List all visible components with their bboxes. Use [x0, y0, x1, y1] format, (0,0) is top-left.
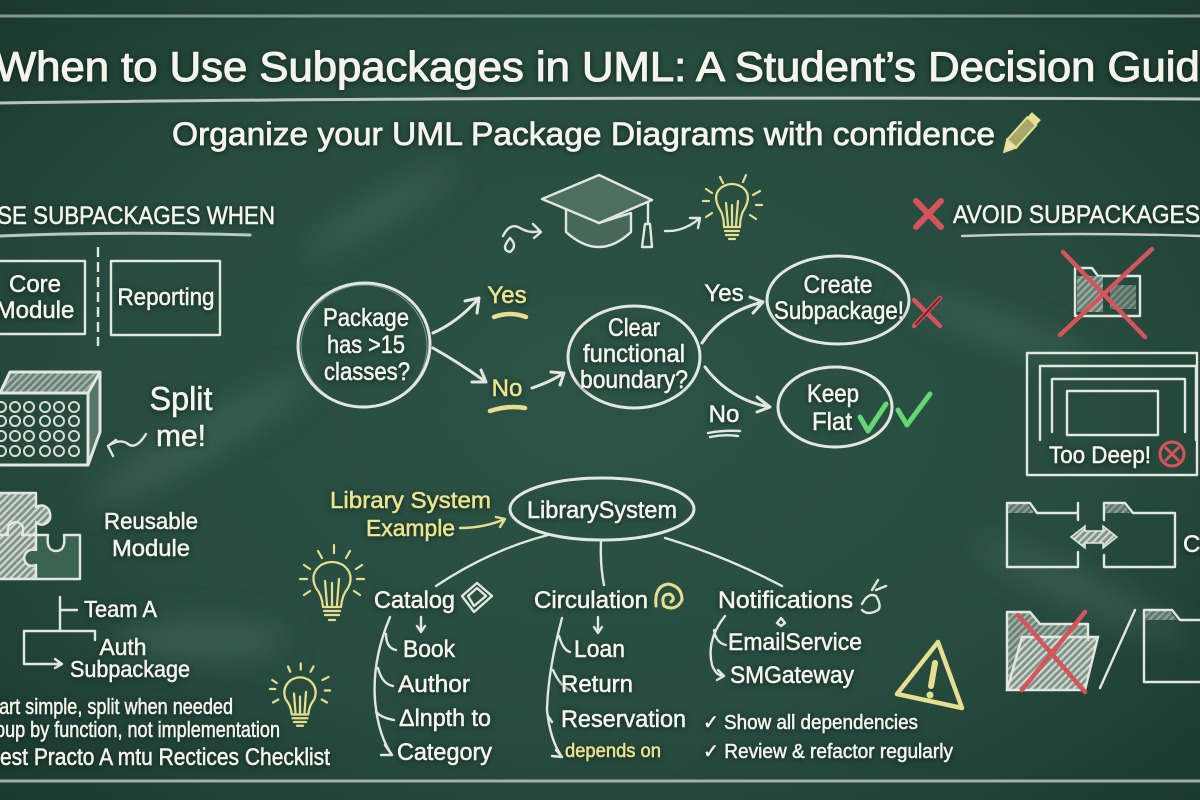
node: package has more than 15 classes — [293, 277, 435, 413]
label: no boundary: No — [709, 401, 739, 428]
org tree: team a and auth subpackage: Subpackage — [70, 656, 190, 682]
panel: use subpackages when — [0, 202, 330, 771]
column: circulation: depends on — [565, 741, 661, 762]
label: library system example — [330, 487, 491, 541]
label: yes boundary: Yes — [704, 280, 744, 307]
node: clear functional boundary: boundary? — [580, 366, 688, 394]
icon: large class block — [0, 372, 100, 465]
org tree: team a and auth subpackage — [24, 596, 190, 682]
label: no — [490, 375, 525, 411]
arrow: to block — [108, 434, 146, 456]
label: yes: Yes — [487, 282, 527, 309]
node: library system — [510, 478, 694, 540]
column: notifications — [711, 580, 886, 689]
divider slash — [1100, 610, 1135, 688]
panel: avoid subpackages — [916, 201, 1200, 692]
column: catalog — [374, 583, 492, 766]
node: keep flat — [778, 367, 892, 447]
arrow: to yes — [433, 298, 479, 333]
box: core module: Core — [9, 271, 61, 298]
icon: pencil — [1000, 112, 1041, 156]
column: circulation: Loan — [574, 636, 625, 663]
icon: puzzle pieces — [0, 493, 80, 579]
org tree: team a and auth subpackage: Auth — [100, 634, 146, 660]
node: create subpackage — [767, 256, 909, 344]
label: split me — [150, 380, 212, 453]
node: keep flat: Flat — [812, 408, 852, 436]
icon: light bulb top — [703, 175, 762, 239]
column: circulation: Return — [561, 671, 633, 698]
icon: green check one — [860, 404, 886, 431]
label: no: No — [492, 375, 522, 402]
node: package has more than 15 classes: has >15 — [327, 331, 405, 359]
diagram: nested packages too deep — [1027, 353, 1197, 475]
column: notifications: EmailService — [728, 629, 862, 656]
icon: crossed open folder — [1007, 612, 1098, 692]
icon: plain folder — [1144, 610, 1200, 682]
column: circulation: Circulation — [534, 587, 648, 614]
icon: light bulb lower left — [270, 664, 330, 726]
label: library system example: Library System — [330, 487, 491, 513]
label: split me: me! — [156, 418, 206, 453]
arrow: cap to bulb — [665, 218, 700, 231]
node: clear functional boundary: functional — [583, 340, 685, 368]
column: catalog: Author — [398, 671, 470, 698]
branches — [436, 535, 782, 586]
column: circulation — [534, 584, 686, 762]
box: reporting: Reporting — [118, 284, 214, 311]
panel: library system example — [300, 478, 962, 766]
label: reusable module — [104, 508, 198, 561]
label: split me: Split — [150, 380, 212, 417]
arrow: example to root — [460, 517, 505, 528]
panel: decision flowchart — [293, 175, 940, 447]
label: reusable module: Reusable — [104, 508, 198, 534]
node: library system: LibrarySystem — [527, 497, 677, 524]
arrow: boundary to keep — [705, 367, 770, 412]
icon: light bulb center left — [300, 545, 364, 620]
column: catalog: Δlnpth to — [399, 705, 491, 732]
arrow: to no — [433, 348, 486, 382]
column: catalog: Category — [397, 739, 492, 766]
box: reporting — [111, 261, 220, 335]
label: library system example: Example — [366, 515, 455, 541]
label: reusable module: Module — [112, 535, 190, 561]
best practices list — [0, 694, 330, 771]
diagram: nested packages too deep: Too Deep! — [1049, 442, 1151, 469]
node: keep flat: Keep — [807, 380, 859, 408]
icon: crossed folder — [1060, 249, 1152, 337]
checklist — [703, 712, 953, 763]
arrow: boundary to create — [702, 297, 763, 343]
column: notifications: Notifications — [718, 587, 853, 614]
icon: coupled folders — [1007, 503, 1200, 567]
node: clear functional boundary — [568, 306, 700, 408]
arrow: no to boundary — [532, 372, 564, 388]
subtitle: Organize your UML Package Diagrams with confidence — [172, 116, 995, 152]
column: catalog: Catalog — [374, 587, 455, 614]
node: clear functional boundary: Clear — [608, 314, 660, 342]
icon: heading red cross — [916, 201, 941, 227]
column: circulation: Reservation — [561, 706, 686, 733]
node: package has more than 15 classes: Package — [323, 304, 409, 332]
icon: warning triangle — [897, 642, 962, 708]
icon: green check two — [898, 394, 930, 425]
title: When to Use Subpackages in UML: A Student’s Decision Guide — [0, 43, 1200, 90]
box: core module — [0, 261, 85, 334]
node: package has more than 15 classes: classes? — [324, 358, 410, 386]
checklist: ✓ Review & refactor regularly — [703, 741, 953, 763]
column: catalog: Book — [403, 636, 456, 663]
checklist: ✓ Show all dependencies — [703, 712, 918, 734]
node: create subpackage: Create — [804, 271, 872, 299]
icon: red cross — [914, 298, 940, 326]
column: notifications: SMGateway — [730, 662, 854, 689]
icon: graduation cap — [503, 175, 652, 252]
org tree: team a and auth subpackage: Team A — [84, 596, 158, 622]
node: create subpackage: Subpackage! — [774, 297, 904, 325]
